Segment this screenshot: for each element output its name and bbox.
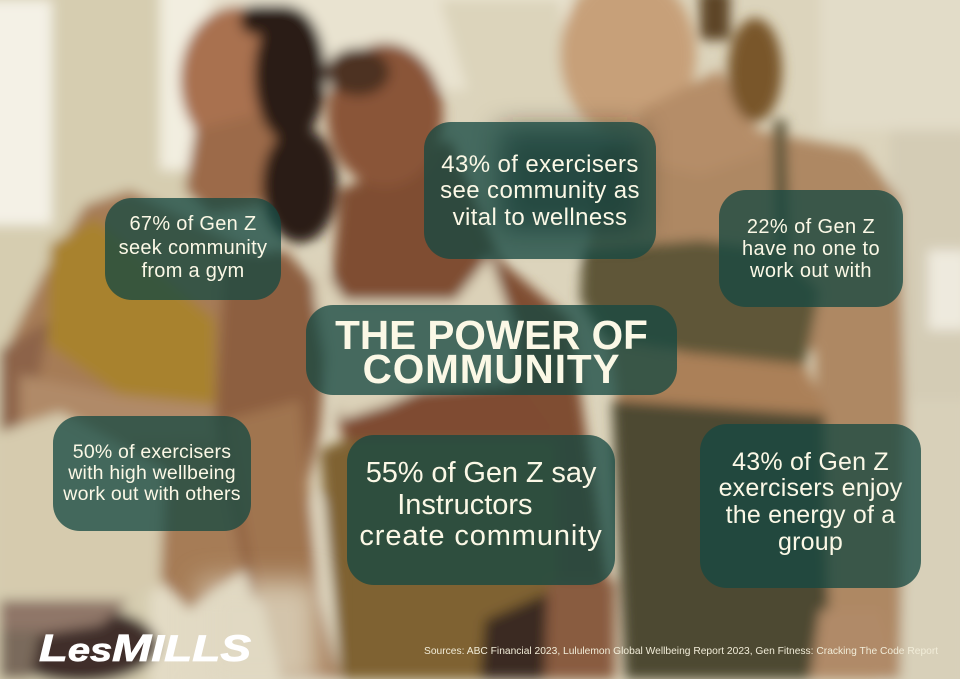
callout: 50% of exercisers	[53, 416, 251, 531]
callout: 55% of Gen Z: 55% of Gen Z say	[366, 457, 596, 489]
title: The Power of Community: THE POWER OF	[335, 312, 648, 358]
title: The Power of Community	[306, 305, 677, 395]
sources line: Sources: ABC Financial 2023, Lululemon Global Wellbeing Report 2023, Gen Fitness: Cracking The Code Report	[424, 646, 938, 657]
callout: 22% of Gen Z: 22% of Gen Z	[747, 216, 875, 238]
callout: 67% of Gen Z: from a gym	[141, 260, 244, 282]
callout: 43% of exercisers: 43% of exercisers	[441, 151, 639, 178]
callout: 43% of Gen Z exercisers: exercisers enjoy	[719, 474, 902, 502]
callout: 22% of Gen Z: work out with	[750, 260, 872, 282]
callout: 55% of Gen Z: create community	[359, 520, 603, 552]
callout: 22% of Gen Z	[719, 190, 903, 307]
logo: Les Mills: LesMILLS	[39, 628, 251, 670]
callout: 55% of Gen Z: Instructors	[397, 489, 533, 521]
woman left	[0, 190, 300, 610]
woman centre	[330, 140, 610, 650]
callout: 43% of Gen Z exercisers: group	[778, 528, 843, 556]
callout: 50% of exercisers: with high wellbeing	[68, 462, 236, 484]
callout: 55% of Gen Z	[347, 435, 615, 585]
callout: 43% of Gen Z exercisers	[700, 424, 921, 588]
title: The Power of Community: COMMUNITY	[363, 346, 620, 392]
callout: 67% of Gen Z: seek community	[119, 237, 267, 259]
callout: 50% of exercisers: work out with others	[63, 483, 241, 505]
callout: 67% of Gen Z: 67% of Gen Z	[129, 213, 256, 235]
callout: 43% of Gen Z exercisers: the energy of a	[726, 501, 895, 529]
callout: 50% of exercisers: 50% of exercisers	[73, 441, 231, 463]
woman right	[585, 120, 905, 679]
callout: 67% of Gen Z	[105, 198, 281, 300]
callout: 43% of exercisers: see community as	[440, 177, 640, 204]
callout: 43% of Gen Z exercisers: 43% of Gen Z	[732, 448, 889, 476]
callout: 22% of Gen Z: have no one to	[742, 238, 880, 260]
callout: 43% of exercisers: vital to wellness	[453, 204, 627, 231]
callout: 43% of exercisers	[424, 122, 656, 259]
